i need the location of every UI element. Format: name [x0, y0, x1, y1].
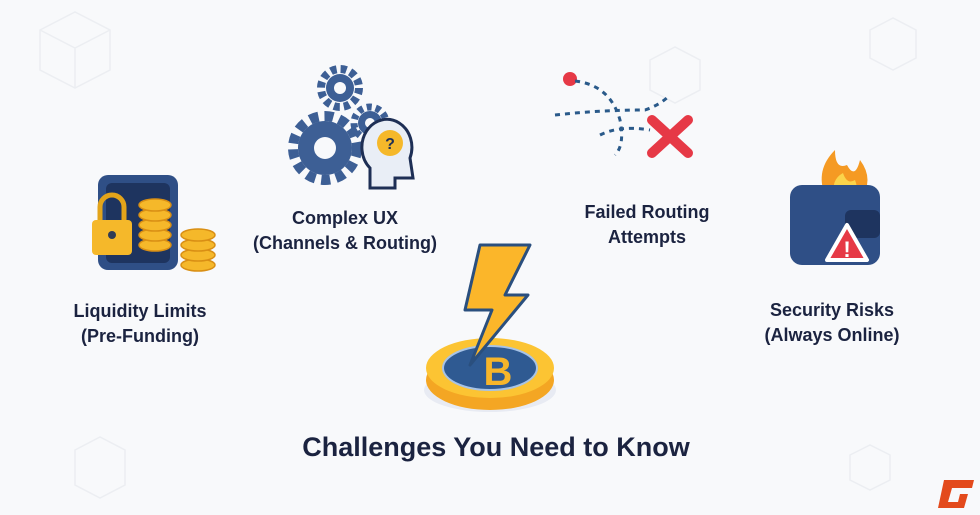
heading: Complex UX: (Channels & Routing) — [253, 233, 437, 253]
icon: gears with head — [288, 65, 415, 190]
icon: lightning bitcoin coin: B — [484, 350, 512, 394]
heading: Failed Routing: Failed Routing — [584, 202, 710, 222]
icon: gears with head: ? — [385, 136, 395, 153]
icon: lightning bitcoin coin — [424, 244, 556, 412]
icon: wallet with fire and warning: ! — [843, 237, 851, 262]
logo — [938, 480, 974, 508]
heading: Failed Routing: Attempts — [608, 227, 686, 247]
heading: Complex UX: Complex UX — [292, 208, 398, 228]
heading: Liquidity Limits — [74, 301, 206, 346]
heading: Security Risks: (Always Online) — [764, 325, 900, 345]
heading: Security Risks: Security Risks — [770, 300, 894, 320]
icon: failed routing — [554, 72, 693, 158]
heading: Security Risks — [764, 300, 900, 345]
icon: wallet with fire and warning — [790, 150, 880, 265]
heading: Failed Routing — [584, 202, 710, 247]
heading: Liquidity Limits: (Pre-Funding) — [81, 326, 199, 346]
icon: safe with coins — [92, 175, 216, 272]
heading: Liquidity Limits: Liquidity Limits — [74, 301, 206, 321]
title: Challenges You Need to Know — [302, 432, 690, 462]
heading: Complex UX — [253, 208, 437, 253]
